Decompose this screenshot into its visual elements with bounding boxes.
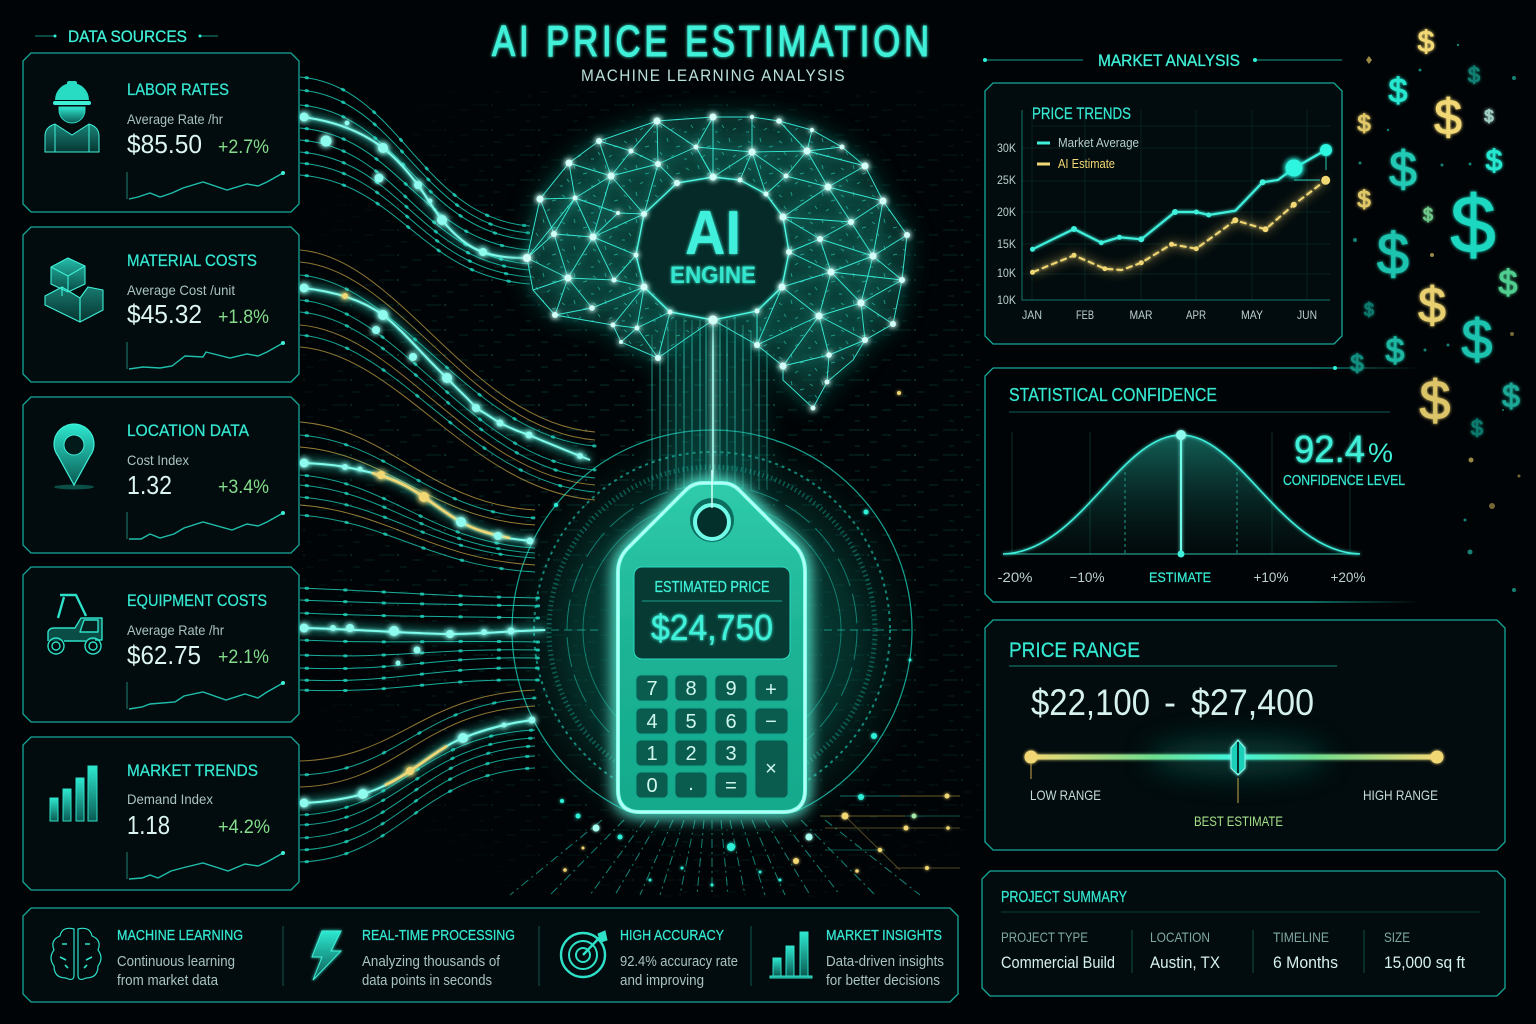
floating dollar signs: $ bbox=[1423, 205, 1433, 225]
equipment costs values: $62.75 bbox=[127, 640, 201, 670]
feature: market insights: for better decisions bbox=[826, 973, 940, 989]
panel: price range bbox=[985, 620, 1505, 850]
calculator keypad: 2 bbox=[685, 743, 697, 765]
equipment costs values: EQUIPMENT COSTS bbox=[127, 591, 267, 610]
material costs values: MATERIAL COSTS bbox=[127, 251, 257, 270]
icon: stacked boxes bbox=[45, 258, 103, 322]
confidence value: % bbox=[1368, 438, 1393, 468]
location data values: Cost Index bbox=[127, 452, 189, 468]
range slider bbox=[1024, 739, 1444, 803]
glow halo around price tag bbox=[497, 425, 927, 855]
calculator keypad: 3 bbox=[725, 743, 737, 765]
connection lines from brain to price tag bbox=[652, 318, 767, 490]
feature: machine learning: MACHINE LEARNING bbox=[117, 928, 243, 944]
sparkline bbox=[127, 171, 285, 199]
price range value bbox=[1031, 682, 1314, 723]
section heading: market analysis bbox=[983, 51, 1372, 70]
location data values: +3.4% bbox=[218, 477, 269, 498]
feature: high accuracy: 92.4% accuracy rate bbox=[620, 954, 738, 970]
AI engine label: AI bbox=[685, 199, 741, 268]
icon: map pin bbox=[54, 424, 94, 490]
location data values: LOCATION DATA bbox=[127, 421, 250, 440]
feature: machine learning: Continuous learning bbox=[117, 954, 235, 970]
icon: target bbox=[561, 931, 607, 977]
range labels bbox=[1030, 787, 1438, 829]
bell curve axis labels bbox=[998, 569, 1366, 585]
calculator keypad: − bbox=[765, 711, 777, 733]
feature: real-time processing: REAL-TIME PROCESSING bbox=[362, 928, 515, 944]
calculator keypad: 0 bbox=[646, 775, 658, 797]
market trends values: MARKET TRENDS bbox=[127, 761, 258, 780]
market trends values: +4.2% bbox=[218, 817, 270, 838]
floating dollar signs: $ bbox=[1364, 300, 1374, 320]
calculator keypad: 1 bbox=[646, 743, 658, 765]
calculator keypad: + bbox=[765, 679, 777, 701]
chart axes labels: 20K bbox=[997, 207, 1016, 219]
floating dollar signs: $ bbox=[1377, 222, 1409, 286]
labor rates values: Average Rate /hr bbox=[127, 111, 223, 127]
chart axes labels: APR bbox=[1186, 310, 1206, 322]
subtitle: MACHINE LEARNING ANALYSIS bbox=[581, 66, 846, 85]
material costs values: Average Cost /unit bbox=[127, 282, 235, 298]
dollar field sparkles bbox=[1353, 44, 1520, 592]
panel: statistical confidence bbox=[985, 366, 1420, 602]
title bbox=[492, 17, 933, 85]
location data values: 1.32 bbox=[127, 470, 172, 500]
chart axes labels: 10K bbox=[997, 295, 1016, 307]
panel: equipment costs bbox=[23, 567, 299, 722]
data stream: labor rates bbox=[300, 77, 530, 284]
floating dollar signs: $ bbox=[1484, 106, 1494, 126]
price display: ESTIMATED PRICE bbox=[654, 579, 770, 596]
summary fields: TIMELINE bbox=[1273, 929, 1329, 945]
calculator keypad: 7 bbox=[646, 678, 658, 700]
calculator keypad: 5 bbox=[685, 711, 697, 733]
central data link bbox=[712, 320, 714, 520]
labor rates values: $85.50 bbox=[127, 129, 202, 159]
confidence value bbox=[1283, 429, 1405, 489]
bell curve axis labels: ESTIMATE bbox=[1149, 569, 1211, 585]
range labels: HIGH RANGE bbox=[1363, 787, 1438, 803]
icon: construction worker bbox=[45, 81, 99, 152]
labor rates values bbox=[127, 80, 269, 159]
equipment costs values: Average Rate /hr bbox=[127, 622, 224, 638]
summary values: 15,000 sq ft bbox=[1384, 954, 1465, 972]
panel: labor rates bbox=[23, 53, 299, 212]
chart legend: AI Estimate bbox=[1058, 156, 1115, 171]
summary values: Austin, TX bbox=[1150, 954, 1220, 972]
sparkline bbox=[127, 511, 285, 539]
sparkline bbox=[127, 681, 285, 709]
equipment costs values bbox=[127, 591, 269, 670]
chart grid bbox=[1022, 110, 1330, 300]
circuit traces right of tag bbox=[820, 796, 960, 870]
floating dollar signs: $ bbox=[1357, 186, 1371, 214]
price display: $24,750 bbox=[651, 607, 773, 648]
brain nodes bbox=[523, 114, 910, 410]
chart axes labels: 25K bbox=[997, 175, 1016, 187]
floating dollar signs: $ bbox=[1350, 350, 1364, 378]
summary values: Commercial Build bbox=[1001, 954, 1115, 972]
floating dollar signs: $ bbox=[1471, 416, 1483, 440]
price range value: - bbox=[1164, 682, 1176, 723]
calculator keypad: × bbox=[765, 758, 777, 780]
floating dollar signs: $ bbox=[1419, 368, 1451, 432]
summary fields: LOCATION bbox=[1150, 929, 1210, 945]
price tag calculator bbox=[618, 470, 805, 812]
floating dollar signs: $ bbox=[1418, 26, 1435, 58]
panel: project summary: PROJECT SUMMARY bbox=[1001, 889, 1127, 906]
chart axes labels: JAN bbox=[1022, 310, 1042, 322]
sparkline bbox=[127, 851, 285, 879]
equipment costs values: +2.1% bbox=[218, 647, 269, 668]
material costs values bbox=[127, 251, 269, 329]
data stream: equipment costs bbox=[300, 588, 545, 691]
market trends values: Demand Index bbox=[127, 791, 213, 807]
floating dollar signs: $ bbox=[1389, 72, 1408, 110]
radial data burst under tag bbox=[510, 820, 920, 895]
feature: high accuracy bbox=[561, 928, 738, 989]
floating dollar signs: $ bbox=[1486, 144, 1503, 178]
bell curve axis labels: -20% bbox=[998, 569, 1032, 585]
chart legend: Market Average bbox=[1058, 135, 1139, 150]
icon: loader vehicle bbox=[48, 595, 102, 654]
feature: market insights: MARKET INSIGHTS bbox=[826, 928, 942, 944]
bell curve bbox=[1003, 430, 1360, 558]
section heading: data sources: DATA SOURCES bbox=[68, 27, 187, 46]
panel: market trends bbox=[23, 737, 299, 890]
feature: market insights: Data-driven insights bbox=[826, 954, 944, 970]
market average line bbox=[1030, 144, 1332, 252]
AI engine label: ENGINE bbox=[670, 262, 756, 289]
data stream: market trends bbox=[300, 690, 536, 862]
chart axes labels: MAR bbox=[1130, 310, 1152, 322]
sparkline bbox=[127, 341, 285, 369]
floating dollar signs: $ bbox=[1434, 89, 1462, 145]
chart axes labels: 10K bbox=[997, 268, 1016, 280]
floating dollar signs: $ bbox=[1461, 308, 1493, 370]
labor rates values: +2.7% bbox=[218, 137, 269, 158]
panel: price range: PRICE RANGE bbox=[1009, 639, 1140, 662]
range labels: LOW RANGE bbox=[1030, 787, 1101, 803]
calculator keypad: 8 bbox=[685, 678, 697, 700]
radar rings around price tag bbox=[512, 430, 912, 830]
floating dollar signs: $ bbox=[1502, 378, 1520, 414]
calculator keypad: = bbox=[725, 775, 737, 797]
summary values: 6 Months bbox=[1273, 954, 1338, 972]
price display bbox=[634, 567, 790, 659]
AI engine label bbox=[670, 199, 756, 289]
summary fields: PROJECT TYPE bbox=[1001, 929, 1088, 945]
panel: project summary bbox=[982, 871, 1505, 996]
feature: high accuracy: and improving bbox=[620, 973, 704, 989]
market trends values bbox=[127, 761, 270, 840]
icon: brain bbox=[51, 928, 101, 979]
range labels: BEST ESTIMATE bbox=[1194, 813, 1283, 829]
summary values bbox=[1001, 954, 1465, 972]
chart axes labels: MAY bbox=[1241, 310, 1263, 322]
feature: high accuracy: HIGH ACCURACY bbox=[620, 928, 724, 944]
summary fields: SIZE bbox=[1384, 929, 1410, 945]
floating dollar signs: $ bbox=[1450, 180, 1496, 270]
brain neural network bbox=[523, 114, 910, 410]
calculator keypad: . bbox=[688, 773, 694, 795]
material costs values: $45.32 bbox=[127, 299, 202, 329]
feature: machine learning bbox=[51, 928, 243, 989]
panel: price trends chart bbox=[985, 83, 1342, 344]
chart axes labels: JUN bbox=[1297, 310, 1317, 322]
data stream: material costs bbox=[300, 250, 595, 500]
floating dollar signs: $ bbox=[1418, 277, 1446, 333]
floating dollar signs: $ bbox=[1389, 141, 1417, 197]
calculator keypad: 6 bbox=[725, 711, 737, 733]
icon: insight bars bbox=[770, 932, 812, 978]
location data values bbox=[127, 421, 269, 500]
chart axes labels: 15K bbox=[997, 239, 1016, 251]
chart axes labels bbox=[997, 143, 1317, 322]
title: AI PRICE ESTIMATION bbox=[492, 17, 933, 66]
floating dollar signs: $ bbox=[1499, 264, 1518, 302]
tag hole bbox=[690, 470, 734, 542]
feature: real-time processing bbox=[312, 928, 515, 989]
burst data points bbox=[554, 391, 950, 886]
chart axes labels: FEB bbox=[1076, 310, 1094, 322]
chart axes labels: 30K bbox=[997, 143, 1016, 155]
panel: material costs bbox=[23, 227, 299, 382]
material costs values: +1.8% bbox=[218, 307, 269, 328]
feature: real-time processing: Analyzing thousands of bbox=[362, 954, 501, 970]
bell curve axis labels: +10% bbox=[1254, 569, 1288, 585]
chart legend bbox=[1037, 135, 1139, 171]
calculator keypad: 9 bbox=[725, 678, 737, 700]
bell curve axis labels: −10% bbox=[1070, 569, 1104, 585]
section heading: market analysis: MARKET ANALYSIS bbox=[1098, 51, 1240, 70]
summary fields bbox=[1001, 929, 1410, 945]
price range value: $27,400 bbox=[1191, 682, 1314, 723]
bell curve axis labels: +20% bbox=[1330, 569, 1366, 585]
feature: real-time processing: data points in seconds bbox=[362, 973, 492, 989]
panel: price trends chart: PRICE TRENDS bbox=[1032, 104, 1131, 123]
calculator keypad: 4 bbox=[646, 711, 658, 733]
confidence value: 92.4 bbox=[1294, 429, 1365, 471]
labor rates values: LABOR RATES bbox=[127, 80, 229, 99]
feature: market insights bbox=[770, 928, 944, 989]
feature: machine learning: from market data bbox=[117, 973, 219, 989]
confidence value: CONFIDENCE LEVEL bbox=[1283, 473, 1405, 489]
floating dollar signs: $ bbox=[1357, 110, 1371, 138]
price range value: $22,100 bbox=[1031, 682, 1150, 723]
icon: bar chart bbox=[50, 766, 97, 821]
panel: feature strip bbox=[23, 908, 958, 1002]
AI estimate line bbox=[1030, 176, 1330, 275]
calculator keypad bbox=[636, 675, 788, 798]
floating dollar signs bbox=[1350, 26, 1520, 440]
market trends values: 1.18 bbox=[127, 810, 170, 840]
panel: location data bbox=[23, 397, 299, 553]
panel: statistical confidence: STATISTICAL CONFIDENCE bbox=[1009, 385, 1217, 405]
data stream: location data bbox=[300, 422, 535, 572]
floating dollar signs: $ bbox=[1468, 62, 1480, 88]
icon: lightning bolt bbox=[312, 931, 341, 980]
floating dollar signs: $ bbox=[1386, 332, 1405, 370]
